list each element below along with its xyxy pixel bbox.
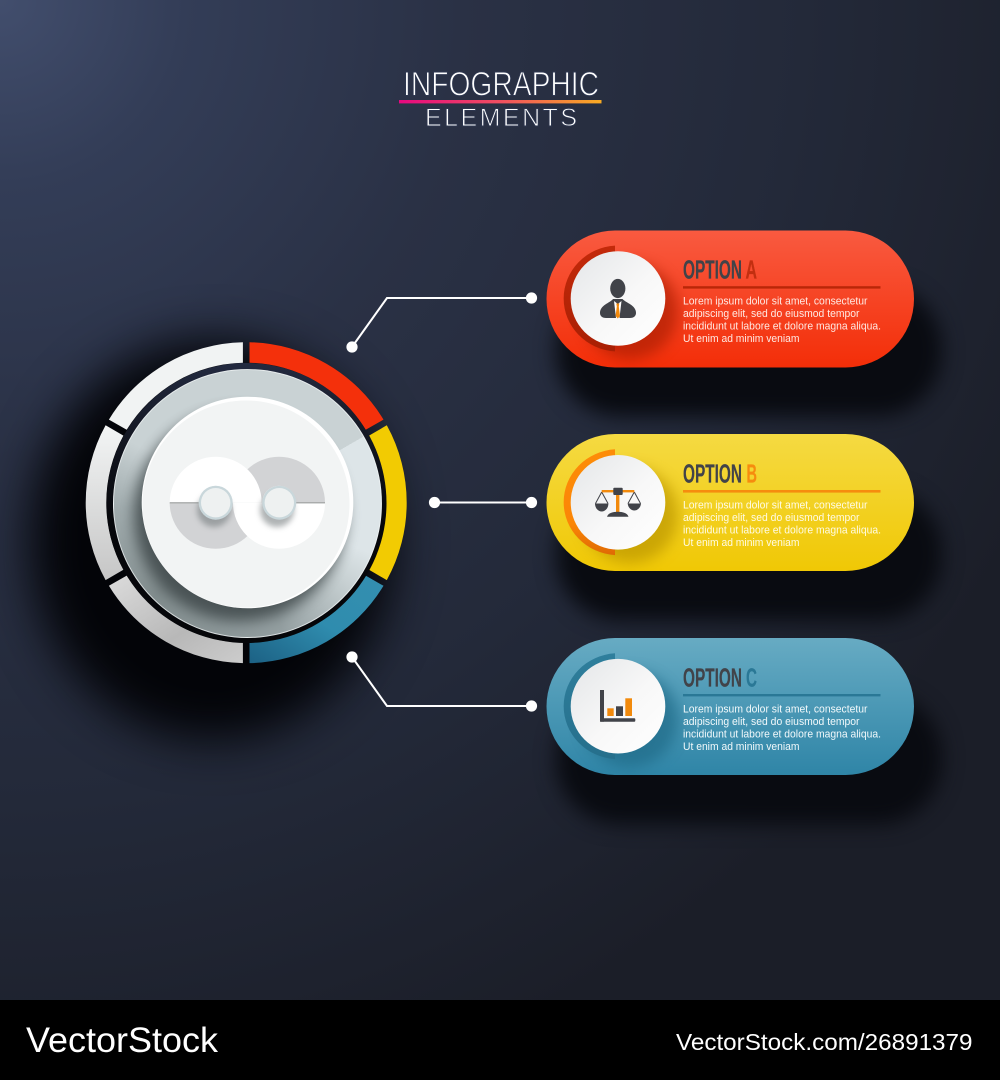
option C body text: adipiscing elit, sed do eiusmod tempor — [683, 716, 860, 728]
title: elements: ELEMENTS — [425, 104, 577, 132]
footer logo: VectorStock — [26, 1021, 219, 1060]
footer bar — [0, 1000, 1000, 1080]
icon: businessman — [600, 279, 636, 318]
option C body text: Ut enim ad minim veniam — [683, 741, 800, 753]
ring segment: blue — [250, 576, 384, 663]
infinity symbol — [170, 457, 325, 549]
fold line left — [170, 502, 199, 503]
dark ring gap — [106, 363, 386, 643]
option B body text — [683, 500, 881, 549]
ring segment: red — [250, 342, 384, 430]
icon: scales — [595, 488, 641, 517]
pill C — [546, 638, 914, 775]
pill A arc — [564, 246, 615, 351]
option A body text: Lorem ipsum dolor sit amet, consectetur — [683, 296, 868, 308]
option C body text: incididunt ut labore et dolore magna aliqua. — [683, 728, 881, 740]
pill C circle shadow — [582, 671, 678, 767]
option A divider — [683, 286, 880, 289]
pill A circle shadow — [582, 263, 678, 359]
option A body text: adipiscing elit, sed do eiusmod tempor — [683, 308, 860, 320]
option C body text: Lorem ipsum dolor sit amet, consectetur — [683, 704, 868, 716]
white disc — [142, 400, 350, 608]
pill B — [546, 434, 914, 571]
option C body text — [683, 704, 881, 753]
connector A — [346, 292, 537, 353]
footer url: VectorStock.com/26891379 — [676, 1029, 972, 1055]
pill A white circle — [571, 251, 665, 346]
pill B circle shadow — [582, 467, 678, 563]
hub shadows — [197, 493, 294, 527]
pill C arc — [564, 653, 615, 759]
option A body text: incididunt ut labore et dolore magna aliqua. — [683, 320, 881, 332]
white disc shadow — [134, 409, 346, 621]
option A body text — [683, 296, 881, 345]
segmented outer ring — [86, 342, 407, 663]
pill B arc — [564, 449, 615, 555]
central circle diagram — [86, 342, 407, 663]
circle drop shadow — [30, 340, 394, 740]
option C divider — [683, 694, 880, 696]
option B body text: Ut enim ad minim veniam — [683, 537, 800, 549]
middle disc — [113, 369, 382, 638]
ring segment: grey upper left — [109, 342, 243, 430]
option C heading: OPTION — [683, 662, 742, 692]
icon: bar chart — [600, 690, 635, 722]
ring segment: grey left — [86, 425, 123, 580]
pill B white circle — [571, 455, 665, 550]
title gradient bar — [399, 100, 602, 103]
option A heading: OPTION — [683, 254, 742, 284]
option C heading: C — [746, 662, 757, 692]
option B heading: OPTION — [683, 458, 742, 488]
option A body text: Ut enim ad minim veniam — [683, 333, 800, 345]
grey half ring left — [170, 503, 262, 549]
option B divider — [683, 490, 880, 493]
connector B — [429, 497, 537, 508]
fold line right — [296, 502, 325, 503]
white half ring right — [233, 503, 325, 549]
pill shadows — [556, 285, 942, 824]
pill C white circle — [571, 659, 665, 754]
white half ring left — [170, 457, 262, 503]
option B body text: Lorem ipsum dolor sit amet, consectetur — [683, 500, 868, 512]
title: infographic: INFOGRAPHIC — [403, 66, 599, 104]
title — [399, 66, 602, 132]
grey half ring right — [233, 457, 325, 503]
option B body text: incididunt ut labore et dolore magna aliqua. — [683, 524, 881, 536]
option B heading: B — [746, 458, 757, 488]
panel: option C — [546, 638, 914, 775]
option B body text: adipiscing elit, sed do eiusmod tempor — [683, 512, 860, 524]
ring segment: yellow — [369, 425, 407, 580]
option A heading: A — [746, 254, 757, 284]
panel: option B — [546, 434, 914, 571]
white disc rim — [142, 397, 353, 608]
connector C — [346, 651, 537, 712]
ring segment: grey lower left — [109, 576, 243, 663]
hub left — [199, 486, 233, 520]
hub right — [262, 486, 296, 520]
pill A — [546, 230, 914, 368]
panel: option A — [546, 230, 914, 368]
